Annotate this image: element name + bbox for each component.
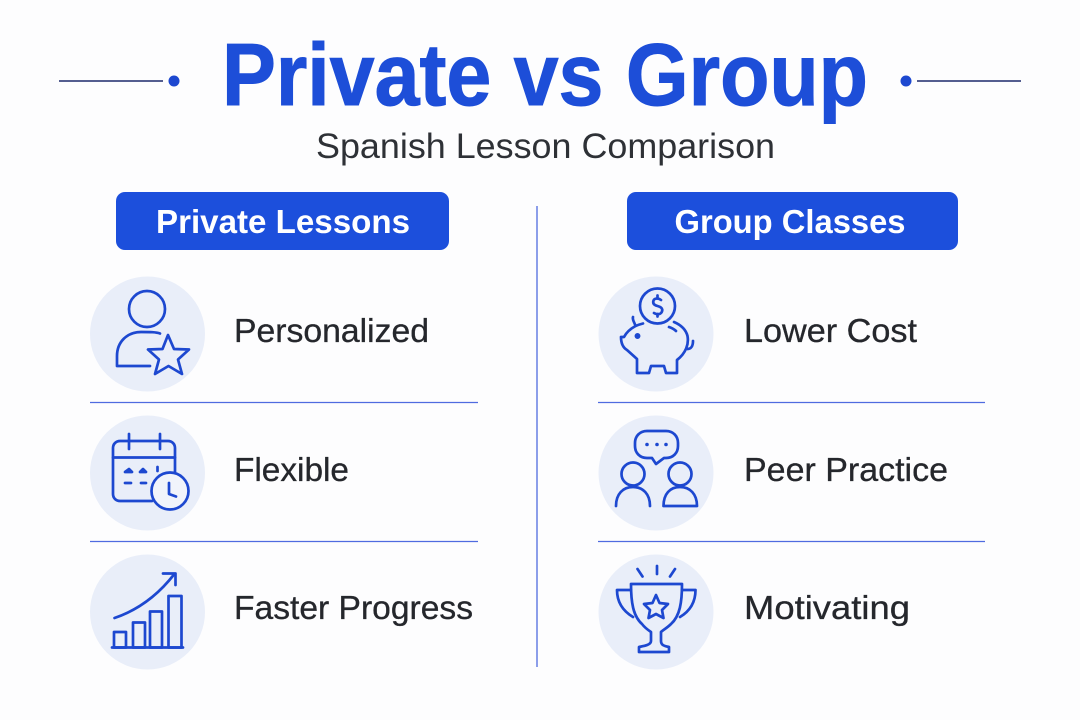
icon: calendar with clock [90, 416, 205, 530]
label: motivating: Motivating [744, 589, 910, 626]
label: personalized: Personalized [234, 312, 429, 349]
label: flexible: Flexible [234, 451, 349, 488]
label: lower cost: Lower Cost [744, 312, 917, 349]
panel: private lessons [90, 192, 478, 670]
icon: trophy [598, 554, 714, 670]
label: faster progress: Faster Progress [234, 589, 473, 626]
heading: group classes: Group Classes [674, 203, 906, 240]
center divider [536, 206, 538, 667]
heading: private lessons: Private Lessons [156, 203, 410, 240]
title ornament: left [59, 76, 180, 86]
subtitle: Spanish Lesson Comparison [316, 127, 775, 166]
panel: group classes [598, 192, 985, 670]
heading: private lessons [116, 192, 449, 250]
title ornament: right [900, 76, 1021, 86]
heading: group classes [627, 192, 958, 250]
icon: peers with speech bubble [598, 416, 714, 530]
icon: piggy bank [598, 276, 714, 392]
icon: growth chart [90, 554, 205, 670]
label: peer practice: Peer Practice [744, 451, 948, 488]
icon: person with star [90, 276, 205, 392]
title: Private vs Group [222, 25, 868, 124]
